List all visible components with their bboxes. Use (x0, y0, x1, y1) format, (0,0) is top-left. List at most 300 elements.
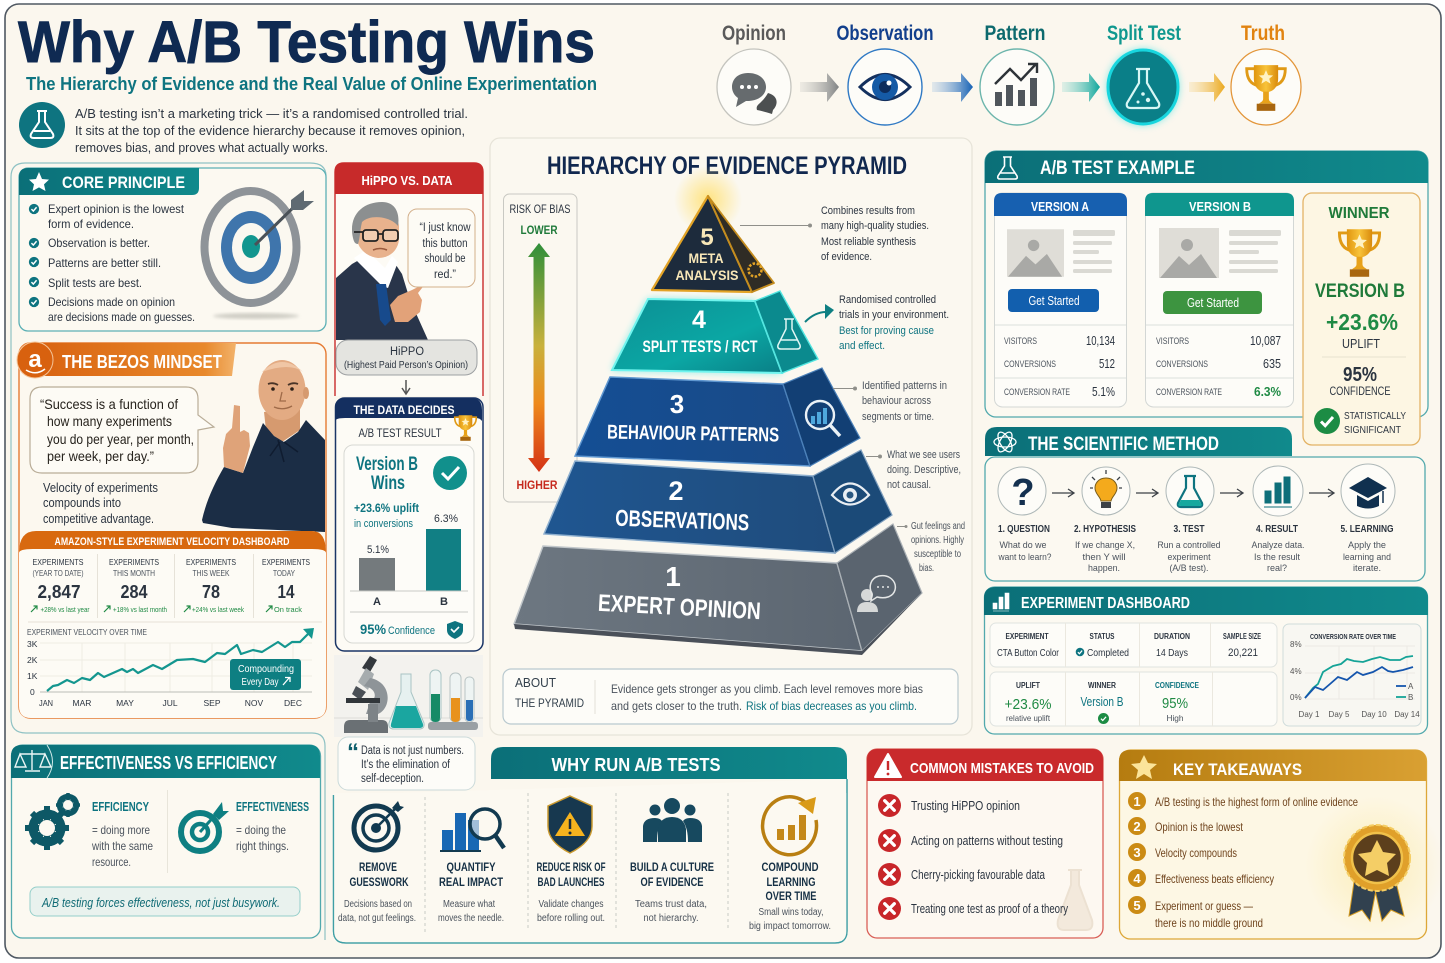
reason: reduce risk: BAD LAUNCHES (538, 877, 605, 889)
card: version b: 6.3% (1254, 384, 1281, 399)
metric: year to date: EXPERIMENTS (32, 558, 84, 567)
summary table: results: Version B (1080, 695, 1124, 709)
heading: the data decides: THE DATA DECIDES (354, 403, 454, 417)
card: version b: VERSION B (1189, 199, 1251, 214)
heading: key takeaways (1119, 750, 1426, 781)
metric: today: 14 (278, 582, 294, 602)
heading: core principle: CORE PRINCIPLE (62, 173, 185, 192)
mistake 1: Trusting HiPPO opinion (911, 798, 1020, 813)
metric: this month: +18% vs last month (113, 605, 167, 614)
text: efficiency (91, 800, 153, 869)
summary table: experiment details: CTA Button Color (997, 647, 1059, 659)
step: hypothesis: happen. (1088, 563, 1120, 574)
line chart: experiment velocity over time: JAN (39, 698, 53, 708)
summary table: experiment details: EXPERIMENT (1006, 632, 1049, 641)
heading: the data decides (335, 398, 482, 421)
callout: meta analysis: of evidence. (821, 251, 872, 263)
reason: culture of evidence: BUILD A CULTURE (630, 862, 714, 874)
step: learning: iterate. (1353, 563, 1381, 574)
card: version a (994, 193, 1127, 407)
reason: compound learning (749, 797, 831, 932)
label: hippo definition: (Highest Paid Person’s Opinion) (344, 359, 468, 371)
step: learning: Apply the (1348, 540, 1386, 551)
heading: hippo vs data (335, 163, 483, 194)
arrow: question to hypothesis (1052, 489, 1074, 497)
callout: compounding every day: Compounding (238, 664, 294, 675)
arrow: test to result (1220, 489, 1243, 497)
heading: hippo vs data: HiPPO VS. DATA (362, 174, 452, 188)
reason: remove guesswork: GUESSWORK (350, 877, 409, 889)
arrow: pattern to split test (1062, 73, 1100, 102)
callout: behaviour patterns: segments or time. (862, 411, 934, 423)
risk of bias scale: LOWER (520, 223, 558, 237)
step: test: Run a controlled (1158, 540, 1220, 551)
card: version a: 512 (1099, 357, 1115, 371)
bar chart: a vs b: B (440, 596, 448, 608)
callout: expert opinion: Gut feelings and (911, 521, 965, 532)
line chart: conversion rate over time: CONVERSION RATE OVER TIME (1310, 632, 1396, 641)
metric: this week (184, 558, 244, 614)
step: result: real? (1267, 563, 1287, 574)
pyramid tier 1: expert opinion (514, 524, 922, 655)
step: hypothesis (1074, 467, 1136, 574)
step: hypothesis: If we change X, (1075, 540, 1135, 551)
step: question: 1. QUESTION (998, 524, 1050, 535)
takeaway 5: there is no middle ground (1155, 916, 1263, 930)
intro text: It sits at the top of the evidence hierarchy because it removes opinion, (75, 123, 465, 138)
heading: effectiveness vs efficiency: EFFECTIVENESS VS EFFICIENCY (60, 753, 277, 773)
mistake 2 (878, 829, 1063, 852)
panel: common mistakes to avoid (867, 749, 1103, 938)
icon: confidence shield (447, 621, 463, 639)
callout: split tests: Randomised controlled (839, 294, 936, 306)
icon: small trophy (455, 415, 476, 441)
quote bubble (30, 387, 214, 473)
reason: culture of evidence: Teams trust data, (635, 899, 707, 910)
speech bubble: i just know (408, 209, 475, 287)
step: truth: Truth (1241, 22, 1285, 45)
line chart: conversion rate over time: Day 14 (1394, 710, 1420, 719)
quote bubble: you do per year, per month, (47, 431, 194, 447)
reason: compound learning: OVER TIME (766, 891, 817, 903)
step: pattern (980, 22, 1054, 125)
intro text (75, 106, 468, 155)
summary table: results: relative uplift (1006, 713, 1051, 723)
metric: year to date: 2,847 (38, 582, 80, 602)
metric: this month: 284 (120, 582, 148, 602)
arrow: hypothesis to test (1136, 489, 1158, 497)
bullet list: Decisions made on opinion (48, 295, 175, 309)
summary table: experiment details: DURATION (1154, 632, 1190, 641)
velocity text: competitive advantage. (43, 512, 154, 526)
velocity text: Velocity of experiments (43, 481, 158, 495)
reason: reduce risk: Validate changes (538, 899, 604, 910)
panel: winner: CONFIDENCE (1330, 384, 1390, 398)
reason: compound learning: big impact tomorrow. (749, 921, 831, 932)
text: efficiency: = doing more (92, 823, 150, 837)
mistake 3: Cherry-picking favourable data (911, 867, 1046, 882)
arrow: opinion to observation (800, 73, 839, 102)
reason: reduce risk: REDUCE RISK OF (536, 862, 606, 874)
takeaway 2: 2 (1133, 819, 1141, 834)
panel: a/b test example (985, 151, 1428, 417)
panel: winner: WINNER (1328, 205, 1390, 222)
step: question: What do we (1000, 540, 1046, 551)
summary table: experiment details (990, 623, 1277, 667)
summary table: experiment details: 14 Days (1156, 647, 1188, 659)
pyramid tier 3: behaviour patterns (575, 368, 860, 466)
step: split test (1107, 22, 1181, 125)
reason: compound learning: Small wins today, (758, 907, 824, 918)
callout: expert opinion (897, 521, 965, 574)
label: hippo definition (336, 340, 477, 375)
step: pattern: Pattern (984, 22, 1046, 45)
card: version a: 10,134 (1086, 334, 1115, 348)
card: version b: 10,087 (1250, 334, 1281, 348)
card: version a: Get Started (1028, 294, 1080, 308)
summary table: results: 95% (1162, 695, 1188, 712)
summary table: experiment details: 20,221 (1228, 647, 1258, 659)
takeaway 4 (1128, 869, 1274, 887)
step: result: Analyze data. (1252, 540, 1304, 551)
panel: core principle (19, 168, 326, 331)
step: learning (1340, 464, 1395, 574)
mistake 3 (878, 863, 1046, 886)
reason: compound learning: LEARNING (766, 877, 816, 889)
pyramid tier 2: observations: OBSERVATIONS (615, 505, 750, 535)
speech bubble: i just know: this button (422, 238, 468, 250)
step: truth (1231, 22, 1301, 125)
pyramid tier 4: split tests: 4 (692, 306, 706, 334)
quote: data is not just numbers: “ (347, 739, 359, 766)
line chart: experiment velocity over time: DEC (284, 698, 302, 708)
reason: remove guesswork: data, not gut feelings. (338, 913, 416, 924)
line chart: experiment velocity over time: 0 (30, 687, 35, 697)
risk of bias scale: RISK OF BIAS (510, 204, 571, 216)
line chart: conversion rate over time: Day 10 (1361, 710, 1387, 719)
card: version b: 635 (1263, 357, 1281, 371)
panel: effectiveness vs efficiency (11, 745, 320, 938)
heading: the bezos mindset: a (28, 346, 42, 373)
summary table: experiment details: STATUS (1090, 632, 1115, 641)
arrow: result to learning (1309, 489, 1334, 497)
step: result: Is the result (1254, 552, 1300, 563)
line chart: conversion rate over time (1283, 624, 1421, 726)
panel: hippo vs data (335, 163, 483, 396)
line chart: conversion rate over time: B (1408, 693, 1413, 702)
step: observation: Observation (836, 22, 934, 45)
subtitle: The Hierarchy of Evidence and the Real Value of Online Experimentation (26, 74, 597, 94)
risk of bias scale: HIGHER (516, 478, 558, 492)
callout: split tests: trials in your environment. (839, 309, 949, 321)
callout: expert opinion: susceptible to (914, 549, 961, 560)
heading: experiment dashboard (984, 587, 1428, 615)
metric: year to date: +28% vs last year (40, 605, 90, 614)
step: learning: learning and (1343, 552, 1391, 563)
step: hypothesis: 2. HYPOTHESIS (1074, 524, 1136, 535)
bar chart: a vs b: A (373, 596, 381, 608)
quote bubble: per week, per day.” (47, 448, 154, 464)
takeaway 1: 1 (1133, 794, 1141, 809)
card: version b: Get Started (1187, 296, 1239, 310)
line chart: conversion rate over time: Day 1 (1299, 710, 1320, 719)
heading: core principle (19, 168, 199, 195)
bullet list: are decisions made on guesses. (48, 310, 195, 324)
panel: outer left frame (11, 163, 326, 940)
card: version a: CONVERSIONS (1004, 359, 1056, 369)
metric: this week: THIS WEEK (192, 569, 230, 578)
quote: data is not just numbers: It’s the elimination of (361, 759, 451, 771)
quote bubble: how many experiments (47, 413, 172, 429)
reason: quantify real impact: moves the needle. (438, 913, 504, 924)
card: version b: CONVERSIONS (1156, 359, 1208, 369)
reason: culture of evidence: OF EVIDENCE (640, 877, 704, 889)
reason: quantify real impact: Measure what (443, 899, 495, 910)
metric: today: On track (274, 605, 302, 614)
text: effectiveness: = doing the (236, 823, 286, 837)
callout: behaviour patterns: behaviour across (862, 395, 931, 407)
arrow: observation to pattern (932, 73, 973, 102)
card: version b (1145, 193, 1294, 407)
bar chart: a vs b: 5.1% (367, 544, 389, 556)
result card: Wins (371, 473, 405, 494)
result card: 95% (360, 622, 386, 637)
heading: common mistakes (867, 749, 1103, 781)
text: efficiency: resource. (92, 855, 131, 869)
card: version a: VISITORS (1004, 336, 1037, 346)
takeaway 4: 4 (1133, 871, 1141, 886)
metric: today: TODAY (273, 569, 296, 578)
velocity text (43, 481, 158, 526)
heading: the bezos mindset: THE BEZOS MINDSET (62, 352, 222, 372)
about the pyramid: THE PYRAMID (515, 696, 584, 710)
callout: expert opinion: opinions. Highly (911, 535, 964, 546)
step: result: 4. RESULT (1256, 524, 1298, 535)
panel: why run a/b tests (334, 747, 847, 943)
reason: remove guesswork: REMOVE (359, 862, 397, 874)
takeaway 2 (1128, 817, 1244, 835)
callout: compounding every day (230, 659, 301, 690)
step: test: (A/B test). (1170, 563, 1208, 574)
panel: winner: VERSION B (1315, 281, 1405, 302)
result card: +23.6% uplift (354, 501, 419, 515)
step: test (1158, 467, 1220, 574)
callout: split tests: and effect. (839, 340, 885, 352)
card: version a: VERSION A (1031, 199, 1089, 214)
pyramid tier 3: behaviour patterns: 3 (670, 389, 684, 419)
line chart: experiment velocity over time: 1K (27, 671, 38, 681)
panel: experiment dashboard (984, 587, 1428, 734)
metric: this month: THIS MONTH (113, 569, 155, 578)
bullet list: Patterns are better still. (48, 256, 161, 270)
takeaway 3: 3 (1133, 845, 1141, 860)
result card: Version B (356, 454, 418, 475)
arrow: split test to truth (1189, 73, 1225, 102)
summary table: results: WINNER (1088, 681, 1116, 690)
callout: split tests: Best for proving cause (839, 325, 934, 337)
takeaway 4: Effectiveness beats efficiency (1155, 872, 1274, 886)
reason: quantify real impact (438, 809, 504, 924)
reason: compound learning: COMPOUND (762, 862, 818, 874)
panel: winner: +23.6% (1326, 309, 1398, 335)
callout: split tests (805, 294, 949, 352)
velocity text: compounds into (43, 496, 121, 510)
callout: forces effectiveness: A/B testing forces effectiveness, not just busywork. (41, 895, 280, 910)
pyramid tier 5: meta analysis: 5 (700, 224, 714, 251)
heading: common mistakes: COMMON MISTAKES TO AVOID (910, 760, 1094, 777)
step: test: 3. TEST (1174, 524, 1204, 535)
reason: quantify real impact: QUANTIFY (446, 862, 496, 874)
line chart: experiment velocity over time: EXPERIMENT VELOCITY OVER TIME (27, 627, 147, 637)
speech bubble: i just know: should be (424, 253, 466, 265)
takeaway 5: 5 (1133, 898, 1141, 913)
pyramid tier 4: split tests: SPLIT TESTS / RCT (642, 337, 758, 356)
intro text: removes bias, and proves what actually works. (75, 140, 328, 155)
callout: meta analysis: many high-quality studies. (821, 220, 929, 232)
icon: winner trophy (1339, 229, 1380, 277)
step: question (998, 467, 1052, 563)
step: split test: Split Test (1107, 22, 1181, 45)
pyramid tier 1: expert opinion: EXPERT OPINION (597, 590, 761, 625)
panel: winner: SIGNIFICANT (1344, 425, 1401, 436)
takeaway 2: Opinion is the lowest (1155, 820, 1244, 834)
bullet list: form of evidence. (48, 217, 134, 231)
illustration: lab equipment (334, 655, 483, 737)
text: effectiveness: right things. (236, 839, 289, 853)
pyramid tier 3: behaviour patterns: BEHAVIOUR PATTERNS (607, 422, 779, 447)
line chart: conversion rate over time: 0% (1290, 693, 1302, 702)
line chart: experiment velocity over time: JUL (162, 698, 178, 708)
card: version a: CONVERSION RATE (1004, 387, 1070, 397)
bar chart: a vs b: 6.3% (434, 513, 458, 525)
step: opinion: Opinion (722, 22, 786, 45)
heading: effectiveness vs efficiency (11, 745, 320, 778)
metric: this month (104, 558, 167, 614)
panel: bezos mindset (17, 342, 326, 718)
speech bubble: i just know: “I just know (420, 222, 471, 234)
icon: medal (1344, 825, 1410, 921)
card: version b: VISITORS (1156, 336, 1189, 346)
metric: this month: EXPERIMENTS (109, 558, 159, 567)
panel: winner: UPLIFT (1342, 337, 1380, 351)
callout: compounding every day: Every Day (242, 677, 278, 688)
heading: the scientific method (985, 427, 1292, 456)
about the pyramid (503, 669, 958, 724)
intro text: A/B testing isn’t a marketing trick — it’s a randomised controlled trial. (75, 106, 468, 121)
icon: intro flask (19, 102, 65, 148)
step: hypothesis: then Y will (1082, 552, 1126, 563)
callout: behaviour patterns: Identified patterns in (862, 380, 947, 392)
quote: data is not just numbers: Data is not just numbers. (361, 745, 464, 757)
result card (344, 445, 474, 643)
heading: key takeaways: KEY TAKEAWAYS (1173, 760, 1302, 779)
metric: this week: 78 (202, 582, 220, 602)
callout: meta analysis (740, 205, 929, 263)
callout: behaviour patterns (833, 380, 947, 423)
summary table: results: CONFIDENCE (1155, 681, 1200, 690)
metric: today (262, 558, 310, 614)
about the pyramid: and gets closer to the truth. (611, 699, 742, 713)
result card: Confidence (388, 625, 435, 637)
text: effectiveness (236, 800, 309, 853)
summary table: results: High (1166, 713, 1184, 723)
reason: culture of evidence: not hierarchy. (644, 913, 698, 924)
step: test: experiment (1168, 552, 1211, 563)
process flow: opinion to truth (717, 22, 1301, 125)
bullet list: Observation is better. (48, 236, 150, 250)
pyramid tier 5: meta analysis (652, 166, 774, 292)
icon: gears (25, 793, 80, 850)
mistake 1 (878, 794, 1020, 817)
callout: meta analysis: Most reliable synthesis (821, 236, 916, 248)
callout: observations: doing. Descriptive, (887, 464, 961, 476)
line chart: experiment velocity over time: MAR (73, 698, 91, 708)
line chart: experiment velocity over time: 2K (27, 655, 38, 665)
line chart: conversion rate over time: 8% (1290, 640, 1302, 649)
pyramid tier 5: meta analysis: ANALYSIS (676, 267, 738, 283)
reason: reduce risk (536, 796, 606, 924)
takeaway 3 (1128, 843, 1237, 861)
reason: quantify real impact: REAL IMPACT (439, 877, 503, 889)
about the pyramid: Risk of bias decreases as you climb. (746, 699, 917, 713)
label: a/b test result: A/B TEST RESULT (358, 428, 442, 440)
heading: why run a/b tests (491, 747, 847, 779)
metric: this week: EXPERIMENTS (186, 558, 236, 567)
text: efficiency: EFFICIENCY (92, 800, 150, 814)
line chart: experiment velocity over time: SEP (203, 698, 221, 708)
pyramid tier 2: observations (544, 450, 892, 553)
pyramid tier 4: split tests (612, 291, 818, 373)
about the pyramid: ABOUT (515, 675, 556, 690)
quote bubble: “Success is a function of (40, 396, 178, 412)
dashboard: amazon-style experiment velocity (19, 531, 326, 718)
callout: forces effectiveness (30, 887, 300, 916)
heading: a/b test example (985, 151, 1428, 183)
heading: the scientific method: THE SCIENTIFIC METHOD (1028, 434, 1219, 455)
heading: experiment dashboard: EXPERIMENT DASHBOARD (1021, 595, 1190, 612)
line chart: experiment velocity over time: MAY (116, 698, 134, 708)
label: hippo definition: HiPPO (390, 346, 424, 358)
line chart: conversion rate over time: 4% (1290, 667, 1302, 676)
summary table: experiment details: Completed (1087, 647, 1129, 659)
arrow: down to data (402, 380, 410, 394)
summary table: results: +23.6% (1004, 696, 1052, 713)
takeaway 3: Velocity compounds (1155, 846, 1237, 860)
pyramid tier 1: expert opinion: 1 (665, 561, 681, 592)
summary table: experiment details: SAMPLE SIZE (1223, 632, 1261, 641)
metric: today: EXPERIMENTS (262, 558, 310, 567)
heading: why run a/b tests: WHY RUN A/B TESTS (552, 755, 720, 775)
line chart: conversion rate over time: A (1408, 682, 1414, 691)
mistake 4 (878, 897, 1068, 920)
callout: observations (866, 449, 961, 491)
step: opinion (717, 22, 791, 125)
panel: hierarchy of evidence pyramid (490, 138, 972, 735)
icon: effectiveness target (181, 802, 229, 851)
line chart: experiment velocity over time (27, 627, 314, 708)
panel: winner: 95% (1343, 364, 1377, 386)
mistake 4: Treating one test as proof of a theory (911, 901, 1068, 916)
metric: year to date (31, 558, 90, 614)
heading: pyramid: HIERARCHY OF EVIDENCE PYRAMID (547, 152, 907, 180)
callout: observations: What we see users (887, 449, 960, 461)
panel: winner: STATISTICALLY (1344, 411, 1406, 422)
metric: year to date: (YEAR TO DATE) (32, 569, 84, 578)
text: effectiveness: EFFECTIVENESS (236, 800, 309, 814)
callout: expert opinion: bias. (919, 563, 934, 574)
callout: observations: not causal. (887, 479, 931, 491)
reason: remove guesswork (338, 801, 416, 924)
